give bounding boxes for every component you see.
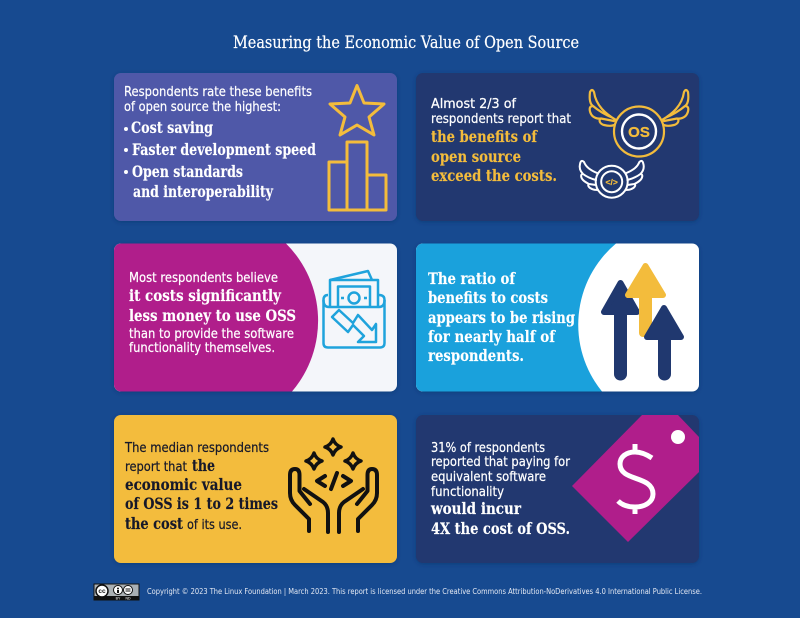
- text: benefits list: Faster development speed: [132, 140, 316, 159]
- text: 31 percent statement: functionality: [431, 485, 504, 500]
- text: median statement: [124, 441, 278, 533]
- text: 31 percent statement: would incur: [430, 499, 522, 518]
- blue arc background: [416, 244, 616, 392]
- text: median statement: of OSS is 1 to 2 times: [125, 494, 278, 513]
- icon: star over bars: [329, 86, 386, 210]
- text: two thirds statement: respondents report that: [431, 112, 571, 127]
- text: two thirds statement: [431, 97, 571, 185]
- text: two thirds statement: exceed the costs.: [431, 166, 557, 185]
- text: costs statement: [129, 271, 296, 356]
- panel: 4X the cost: [416, 415, 699, 563]
- icon: small winged code coin: </>: [606, 177, 618, 187]
- text: 31 percent statement: 31% of respondents: [431, 441, 545, 456]
- icon: Creative Commons license badge: cc: [98, 588, 106, 595]
- text: median statement: The median respondents: [124, 441, 269, 456]
- icon: large winged OS coin: OS: [628, 124, 650, 141]
- text: median statement: the cost: [125, 514, 184, 533]
- panel: ratio rising: [416, 244, 699, 392]
- icon: price tag with dollar sign: [572, 415, 699, 542]
- text: ratio statement: The ratio of: [428, 269, 516, 288]
- text: median statement: report that: [125, 460, 187, 475]
- icon: Creative Commons license badge: BY: [116, 596, 121, 600]
- text: benefits list: Respondents rate these benefits: [124, 85, 312, 100]
- text: median statement: the: [192, 456, 215, 475]
- magenta arc background: [114, 244, 318, 392]
- text: 31 percent statement: [430, 441, 571, 538]
- text: benefits list: and interoperability: [133, 182, 274, 201]
- text: 31 percent statement: reported that paying for: [431, 455, 571, 470]
- icon: wallet with falling money: [324, 271, 384, 348]
- text: two thirds statement: open source: [431, 147, 521, 166]
- text: ratio statement: [428, 269, 575, 365]
- text: costs statement: it costs significantly: [129, 286, 282, 305]
- text: two thirds statement: the benefits of: [431, 127, 538, 146]
- footer copyright text: Copyright © 2023 The Linux Foundation | March 2023. This report is licensed under the Creative Commons Attribution-NoDerivatives 4.0 International Public License.: [147, 587, 702, 596]
- text: benefits list: of open source the highest:: [124, 100, 281, 115]
- text: benefits list: Open standards: [132, 162, 243, 181]
- text: costs statement: Most respondents believe: [129, 271, 278, 286]
- text: costs statement: functionality themselves.: [129, 341, 275, 356]
- icon: small winged code coin: [580, 161, 644, 198]
- panel: top benefits: [114, 73, 397, 221]
- panel: median respondents: [114, 415, 397, 563]
- icon: hands holding code: [290, 439, 377, 532]
- icon: large winged OS coin: [590, 90, 688, 156]
- text: benefits list: [124, 85, 316, 201]
- text: ratio statement: respondents.: [428, 346, 524, 365]
- text: ratio statement: for nearly half of: [428, 327, 556, 346]
- text: 31 percent statement: 4X the cost of OSS.: [431, 519, 570, 538]
- text: costs statement: less money to use OSS: [129, 306, 296, 325]
- panel: costs less to use OSS: [114, 244, 397, 392]
- text: median statement: of its use.: [187, 518, 242, 533]
- panel: benefits exceed costs: [416, 73, 699, 221]
- text: ratio statement: appears to be rising: [428, 308, 575, 327]
- text: two thirds statement: Almost 2/3 of: [431, 97, 516, 112]
- text: median statement: economic value: [125, 475, 242, 494]
- text: costs statement: than to provide the software: [129, 327, 294, 342]
- text: ratio statement: benefits to costs: [428, 288, 548, 307]
- icon: Creative Commons license badge: ND: [125, 596, 131, 600]
- text: 31 percent statement: equivalent software: [431, 470, 546, 485]
- title: Measuring the Economic Value of Open Source: [233, 33, 579, 52]
- text: benefits list: Cost saving: [131, 118, 213, 137]
- icon: rising arrows: [604, 266, 681, 380]
- icon: Creative Commons license badge: [94, 584, 139, 600]
